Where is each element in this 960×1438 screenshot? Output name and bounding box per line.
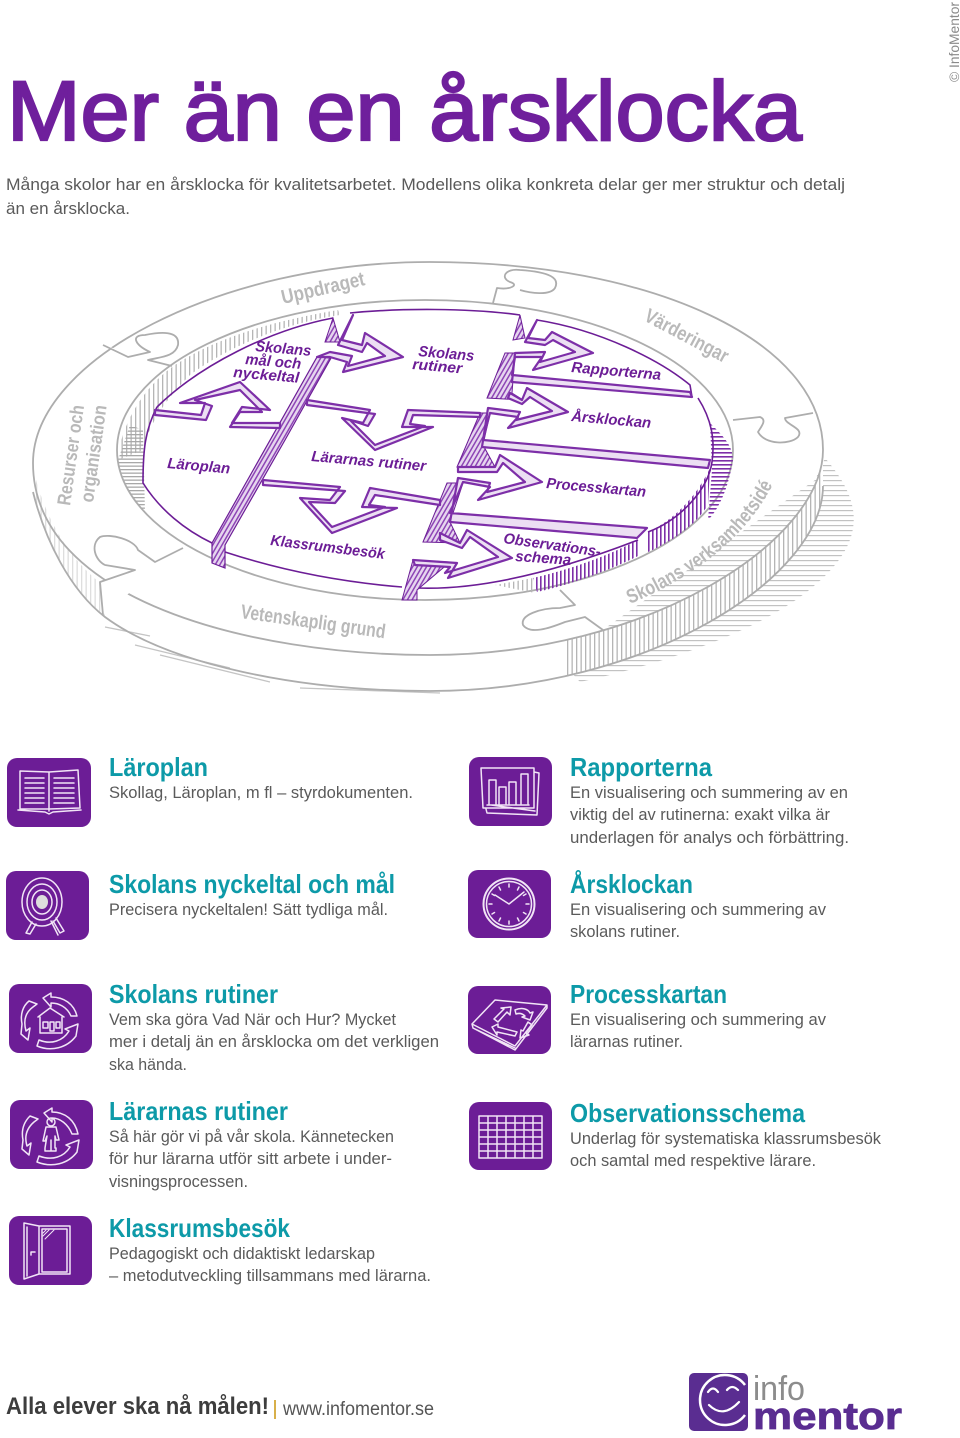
heading and text: Klassrumsbesök: – metodutveckling tillsammans med lärarna.: [109, 1266, 431, 1285]
logo: infomentor: info: [753, 1370, 805, 1408]
heading and text: Skolans rutiner: ska hända.: [109, 1055, 187, 1074]
heading and text: Lärarnas rutiner: Lärarnas rutiner: [109, 1096, 288, 1126]
heading and text: Rapporterna: [570, 752, 849, 847]
footer slogan: Alla elever ska nå målen!: [6, 1393, 269, 1420]
plate labels: Skolans: [255, 338, 312, 360]
heading and text: Lärarnas rutiner: för hur lärarna utför sitt arbete i under-: [109, 1149, 392, 1168]
heading and text: Klassrumsbesök: Pedagogiskt och didaktiskt ledarskap: [109, 1244, 375, 1263]
icon: house in cycle: [9, 984, 92, 1053]
heading and text: Lärarnas rutiner: visningsprocessen.: [109, 1172, 248, 1191]
icon: clock: [468, 870, 551, 938]
plate labels: schema: [515, 548, 572, 569]
heading and text: Skolans rutiner: mer i detalj än en årsklocka om det verkligen: [109, 1032, 439, 1051]
heading and text: Årsklockan: En visualisering och summering av: [570, 900, 826, 919]
heading and text: Klassrumsbesök: Klassrumsbesök: [109, 1213, 290, 1243]
icon: teacher in cycle: [10, 1100, 93, 1169]
inner wall hatching: [118, 310, 340, 460]
puzzle joints: [95, 270, 813, 630]
heading and text: Observationsschema: Underlag för systematiska klassrumsbesök: [570, 1129, 881, 1148]
intro text: Många skolor har en årsklocka för kvalitetsarbetet. Modellens olika konkreta delar ger mer struktur och detalj: [6, 175, 845, 194]
heading and text: Rapporterna: viktig del av rutinerna: exakt vilka är: [570, 805, 830, 824]
heading and text: Lärarnas rutiner: [109, 1096, 394, 1191]
heading and text: Processkartan: [570, 979, 826, 1051]
heading and text: Lärarnas rutiner: Så här gör vi på vår skola. Kännetecken: [109, 1127, 394, 1146]
plate labels: rutiner: [412, 356, 464, 377]
plate labels: Lärarnas rutiner: [311, 448, 428, 475]
ring labels: [54, 268, 772, 643]
plate labels: Processkartan: [546, 475, 647, 501]
footer slogan: [6, 1393, 434, 1420]
heading and text: Skolans nyckeltal och mål: [109, 869, 395, 919]
ring labels: Skolans verksamhetsidé: [626, 479, 772, 603]
intro text: [6, 175, 845, 218]
arrows: [155, 315, 710, 578]
plate labels: Rapporterna: [571, 359, 662, 384]
heading and text: Skolans rutiner: Vem ska göra Vad När och Hur? Mycket: [109, 1010, 396, 1029]
ring top surface: [33, 262, 823, 655]
heading and text: Observationsschema: och samtal med respektive lärare.: [570, 1151, 816, 1170]
icon: target: [6, 871, 89, 940]
heading and text: Processkartan: lärarnas rutiner.: [570, 1032, 683, 1051]
ring labels: Resurser och: [54, 404, 89, 507]
heading and text: Läroplan: [109, 752, 413, 802]
plate labels: nyckeltal: [233, 364, 301, 387]
ring labels: Uppdraget: [279, 268, 367, 309]
footer slogan: www.infomentor.se: [282, 1399, 434, 1420]
ring labels: Vetenskaplig grund: [239, 601, 387, 643]
heading and text: Årsklockan: skolans rutiner.: [570, 922, 680, 941]
plate labels: Observations-: [502, 530, 602, 561]
heading and text: Processkartan: Processkartan: [570, 979, 727, 1009]
icon: process map: [468, 986, 551, 1054]
ring side wall: [33, 450, 823, 691]
hatched plate walls: [212, 357, 331, 568]
plate labels: Klassrumsbesök: [270, 532, 386, 563]
heading and text: Årsklockan: Årsklockan: [570, 869, 693, 899]
heading and text: Rapporterna: Rapporterna: [570, 752, 712, 782]
plate labels: Läroplan: [167, 455, 231, 477]
ring labels: organisation: [77, 404, 112, 504]
plate labels: mål och: [245, 351, 302, 373]
heading and text: Läroplan: Skollag, Läroplan, m fl – styrdokumenten.: [109, 783, 413, 802]
heading and text: Skolans rutiner: [109, 979, 439, 1074]
heading and text: Observationsschema: [570, 1098, 881, 1170]
heading and text: Skolans nyckeltal och mål: Skolans nyckeltal och mål: [109, 869, 395, 899]
heading and text: Läroplan: Läroplan: [109, 752, 208, 782]
heading and text: Skolans nyckeltal och mål: Precisera nyckeltalen! Sätt tydliga mål.: [109, 900, 388, 919]
title: Mer än en årsklocka: [7, 64, 802, 158]
intro text: än en årsklocka.: [6, 199, 130, 218]
icon: book: [7, 758, 91, 827]
icon: bar chart report: [469, 757, 552, 826]
ground scratch lines: [105, 627, 440, 693]
logo: infomentor: mentor: [753, 1396, 902, 1438]
plate edge: [157, 318, 333, 407]
plate labels: Årsklockan: [570, 408, 652, 432]
ring shadow hatching: [560, 458, 854, 682]
heading and text: Processkartan: En visualisering och summering av: [570, 1010, 826, 1029]
heading and text: Rapporterna: En visualisering och summering av en: [570, 783, 848, 802]
logo: infomentor: [689, 1370, 902, 1438]
icon: observation grid: [469, 1102, 552, 1170]
diagram: puzzle ring with school plate: [32, 261, 854, 694]
icon: door: [9, 1216, 92, 1285]
plate labels: [167, 338, 662, 569]
heading and text: Observationsschema: Observationsschema: [570, 1098, 805, 1128]
plate labels: Skolans: [418, 343, 475, 365]
heading and text: Klassrumsbesök: [109, 1213, 431, 1285]
heading and text: Rapporterna: underlagen för analys och förbättring.: [570, 828, 849, 847]
heading and text: Skolans rutiner: Skolans rutiner: [109, 979, 278, 1009]
heading and text: Årsklockan: [570, 869, 826, 941]
ring labels: Värderingar: [641, 305, 732, 368]
